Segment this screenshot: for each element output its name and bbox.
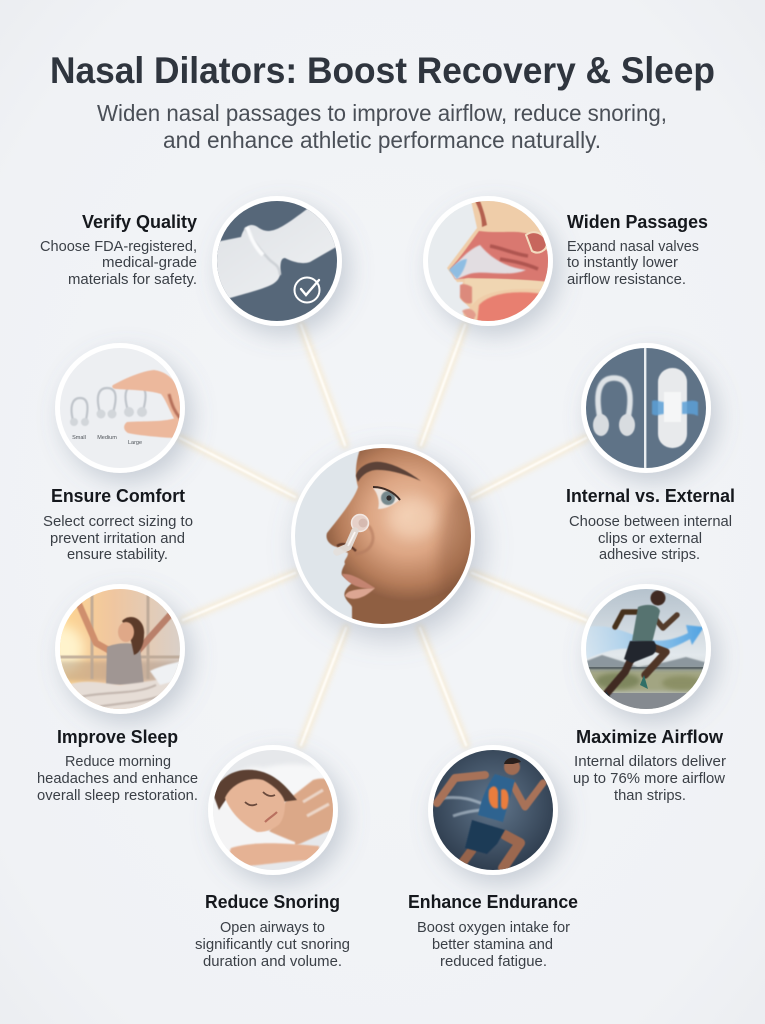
heading: Reduce Snoring (205, 892, 340, 912)
icon: clip sizes held in fingers: Small (72, 435, 86, 441)
icon: clip sizes held in fingers (55, 343, 185, 473)
heading: Improve Sleep (57, 727, 178, 747)
description: materials for safety. (68, 271, 197, 288)
icon: woman sleeping on pillow (208, 745, 338, 875)
icon: nasal anatomy cross-section (423, 196, 558, 331)
icon: runner with blue airflow arrow (581, 584, 711, 714)
description: headaches and enhance (37, 770, 198, 787)
description: than strips. (614, 787, 686, 804)
description: Boost oxygen intake for (417, 919, 570, 936)
icon: athlete with glowing lungs (428, 745, 558, 875)
description (567, 238, 699, 288)
description (43, 513, 193, 563)
icon: internal clip and external strip (581, 343, 711, 473)
icon: woman stretching at sunrise (36, 584, 190, 714)
description: better stamina and (432, 936, 553, 953)
lips (342, 574, 375, 588)
description: ensure stability. (67, 546, 168, 563)
subtitle: and enhance athletic performance naturally. (163, 127, 601, 153)
description: medical-grade (102, 254, 197, 271)
icon: clip sizes held in fingers: Large (128, 440, 142, 446)
jaw shading (436, 492, 471, 598)
panel: verify quality (40, 196, 343, 326)
nasal dilator clip (337, 514, 368, 552)
heading: Verify Quality (82, 212, 197, 232)
panel: widen passages (423, 196, 708, 331)
description: reduced fatigue. (440, 953, 547, 970)
panel: maximize airflow (573, 584, 726, 804)
connector rays (180, 325, 586, 745)
description (569, 513, 732, 563)
heading: Enhance Endurance (408, 892, 578, 912)
icon: silicone strip with check (207, 196, 343, 326)
description: Choose FDA-registered, (40, 238, 197, 255)
heading: Internal vs. External (566, 486, 735, 506)
panel: internal vs external (566, 343, 735, 563)
title: Nasal Dilators: Boost Recovery & Sleep (50, 50, 715, 91)
cheek highlight (389, 498, 437, 538)
description: Internal dilators deliver (574, 753, 726, 770)
description (417, 919, 570, 970)
subtitle (97, 100, 667, 153)
central image: face profile with nasal dilator (291, 441, 483, 631)
heading: Widen Passages (567, 212, 708, 232)
description (37, 753, 198, 804)
description: Expand nasal valves (567, 238, 699, 255)
description: up to 76% more airflow (573, 770, 725, 787)
subtitle: Widen nasal passages to improve airflow, reduce snoring, (97, 100, 667, 126)
description: Open airways to (220, 919, 325, 936)
heading: Ensure Comfort (51, 486, 185, 506)
panel: improve sleep (36, 584, 198, 804)
description (195, 919, 350, 970)
description (573, 753, 726, 804)
panel: enhance endurance (408, 745, 578, 970)
panel: reduce snoring (195, 745, 350, 970)
description: Reduce morning (65, 753, 171, 770)
description: adhesive strips. (599, 546, 700, 563)
description (40, 238, 197, 288)
description: Select correct sizing to (43, 513, 193, 530)
description: airflow resistance. (567, 271, 686, 288)
description: prevent irritation and (50, 530, 185, 547)
description: duration and volume. (203, 953, 342, 970)
heading: Maximize Airflow (576, 727, 724, 747)
nostril (337, 544, 356, 551)
description: Choose between internal (569, 513, 732, 530)
face (326, 448, 471, 624)
icon: clip sizes held in fingers: Medium (97, 435, 117, 441)
description: significantly cut snoring (195, 936, 350, 953)
nose wing shading (360, 526, 375, 553)
eyebrow (356, 462, 421, 482)
description: to instantly lower (567, 254, 678, 271)
description: overall sleep restoration. (37, 787, 198, 804)
eye (373, 488, 400, 509)
panel: ensure comfort (43, 343, 193, 563)
description: clips or external (598, 530, 702, 547)
